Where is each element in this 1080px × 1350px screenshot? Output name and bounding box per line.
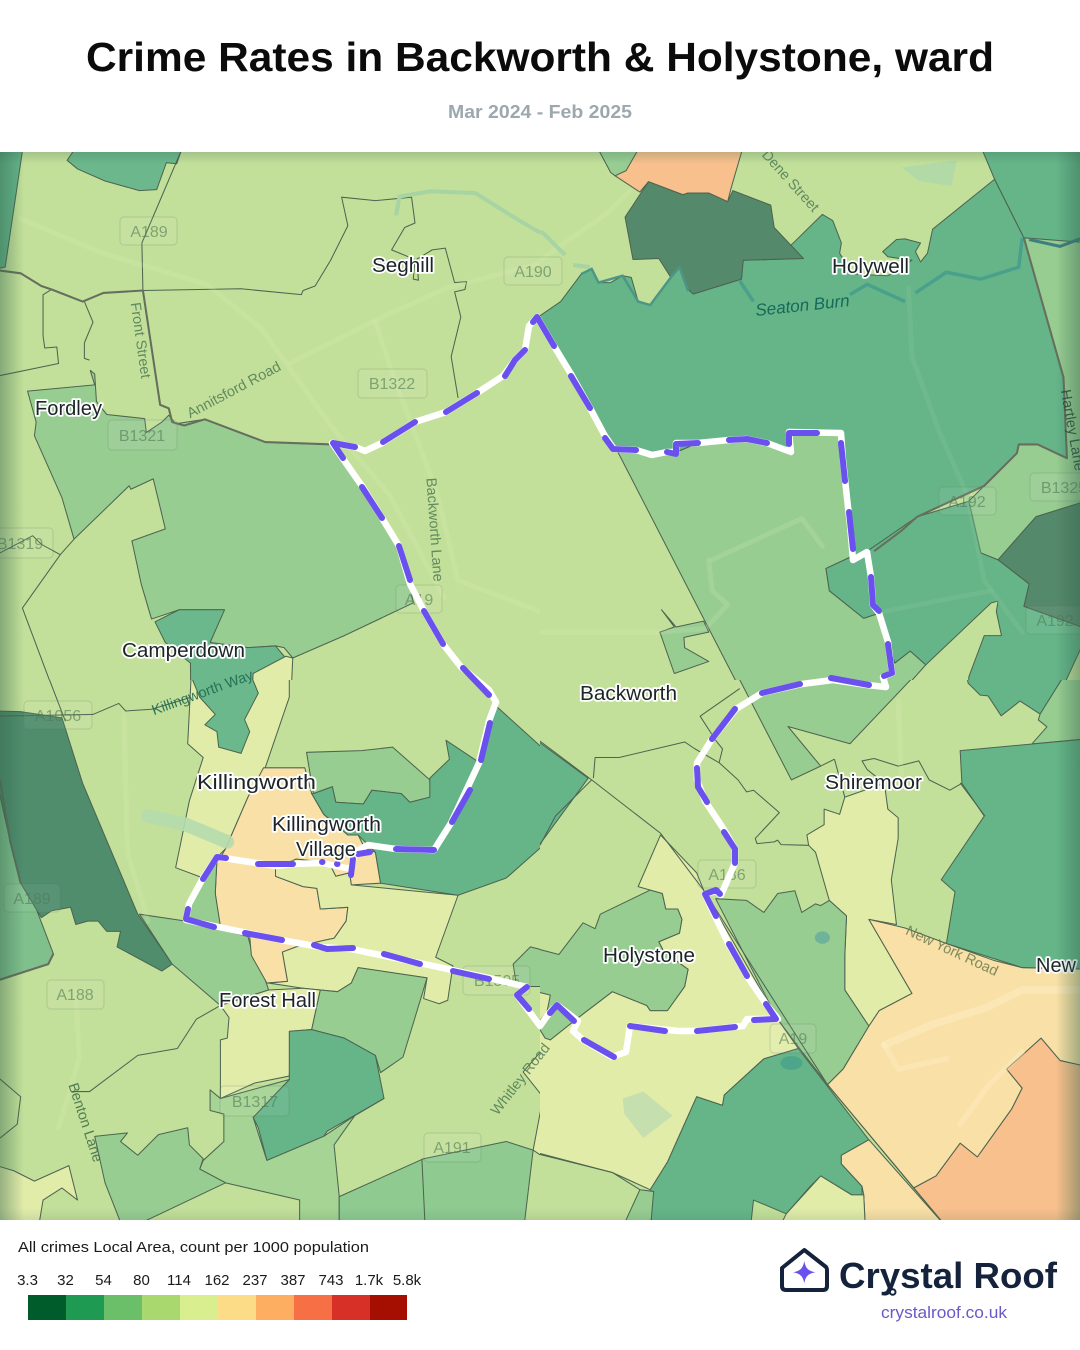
- road number badges: A189: [13, 891, 51, 908]
- icon: house with star: [782, 1250, 827, 1290]
- legend scale values: 54: [95, 1272, 112, 1289]
- road number badges: [0, 217, 1080, 1162]
- road number badges: A192: [948, 494, 986, 511]
- road name labels: Annitsford Road: [184, 359, 284, 422]
- road number badges: B1317: [232, 1094, 278, 1111]
- map area: south-east: [537, 649, 1080, 1231]
- legend scale values: 387: [280, 1272, 306, 1289]
- place name labels: Holywell: [832, 256, 909, 278]
- road name labels: New York Road: [903, 923, 1000, 980]
- place name labels: Forest Hall: [219, 990, 316, 1012]
- logo: Crystal Roof: [782, 1250, 1058, 1322]
- map area: north-east: [540, 152, 1080, 680]
- legend scale values: 237: [242, 1272, 268, 1289]
- legend scale values: 162: [204, 1272, 230, 1289]
- road name labels: Whitley Road: [488, 1041, 554, 1118]
- place name labels: Shiremoor: [825, 772, 922, 794]
- place name labels: Killingworth: [272, 814, 381, 836]
- place name labels: [35, 255, 1077, 1012]
- legend scale values: 80: [133, 1272, 150, 1289]
- place name labels: Village: [296, 839, 356, 861]
- road number badges: A19: [779, 1031, 807, 1048]
- place name labels: Killingworth: [197, 772, 316, 794]
- legend: [17, 1239, 422, 1320]
- legend scale values: 3.3: [17, 1272, 38, 1289]
- road number badges: A186: [708, 867, 746, 884]
- road number badges: B1321: [119, 428, 165, 445]
- road number badges: A189: [130, 224, 168, 241]
- title: Crime Rates in Backworth & Holystone, ward: [86, 34, 994, 80]
- road name labels: Killingworth Way: [150, 667, 256, 719]
- road name labels: Backworth Lane: [422, 477, 446, 582]
- road number badges: A19: [405, 592, 433, 609]
- road number badges: A190: [514, 264, 552, 281]
- legend scale values: 32: [57, 1272, 74, 1289]
- legend scale values: 1.7k: [355, 1272, 384, 1289]
- legend scale values: [17, 1272, 422, 1289]
- legend scale values: 114: [167, 1272, 191, 1289]
- legend scale values: 743: [318, 1272, 344, 1289]
- place name labels: New: [1036, 955, 1077, 977]
- place name labels: Seghill: [372, 255, 434, 277]
- road name labels: Front Street: [127, 301, 153, 379]
- map area: north-west: [0, 147, 540, 735]
- place name labels: Fordley: [35, 398, 102, 420]
- website url: crystalroof.co.uk: [881, 1304, 1008, 1322]
- road number badges: A192: [1036, 613, 1074, 630]
- road name labels: Seaton Burn: [754, 291, 850, 320]
- road name labels: [64, 147, 1080, 1164]
- ward boundary: white dashed outline: [186, 317, 892, 1057]
- subtitle: date range: Mar 2024 - Feb 2025: [448, 102, 632, 122]
- place name labels: Camperdown: [122, 640, 245, 662]
- road name labels: Dene Street: [758, 147, 822, 215]
- road number badges: A191: [433, 1140, 471, 1157]
- road number badges: A1056: [35, 708, 81, 725]
- road number badges: B1322: [369, 376, 415, 393]
- legend title: All crimes Local Area, count per 1000 population: [18, 1239, 369, 1256]
- road number badges: A188: [56, 987, 94, 1004]
- map area: south-west: [0, 680, 540, 1220]
- road name labels: Benton Lane: [64, 1081, 105, 1164]
- legend colour swatches: [28, 1295, 407, 1320]
- wordmark: Crystal Roof: [839, 1255, 1058, 1296]
- place name labels: Holystone: [603, 945, 695, 967]
- road number badges: B1505: [474, 973, 520, 990]
- legend scale values: 5.8k: [393, 1272, 422, 1289]
- place name labels: Backworth: [580, 683, 677, 705]
